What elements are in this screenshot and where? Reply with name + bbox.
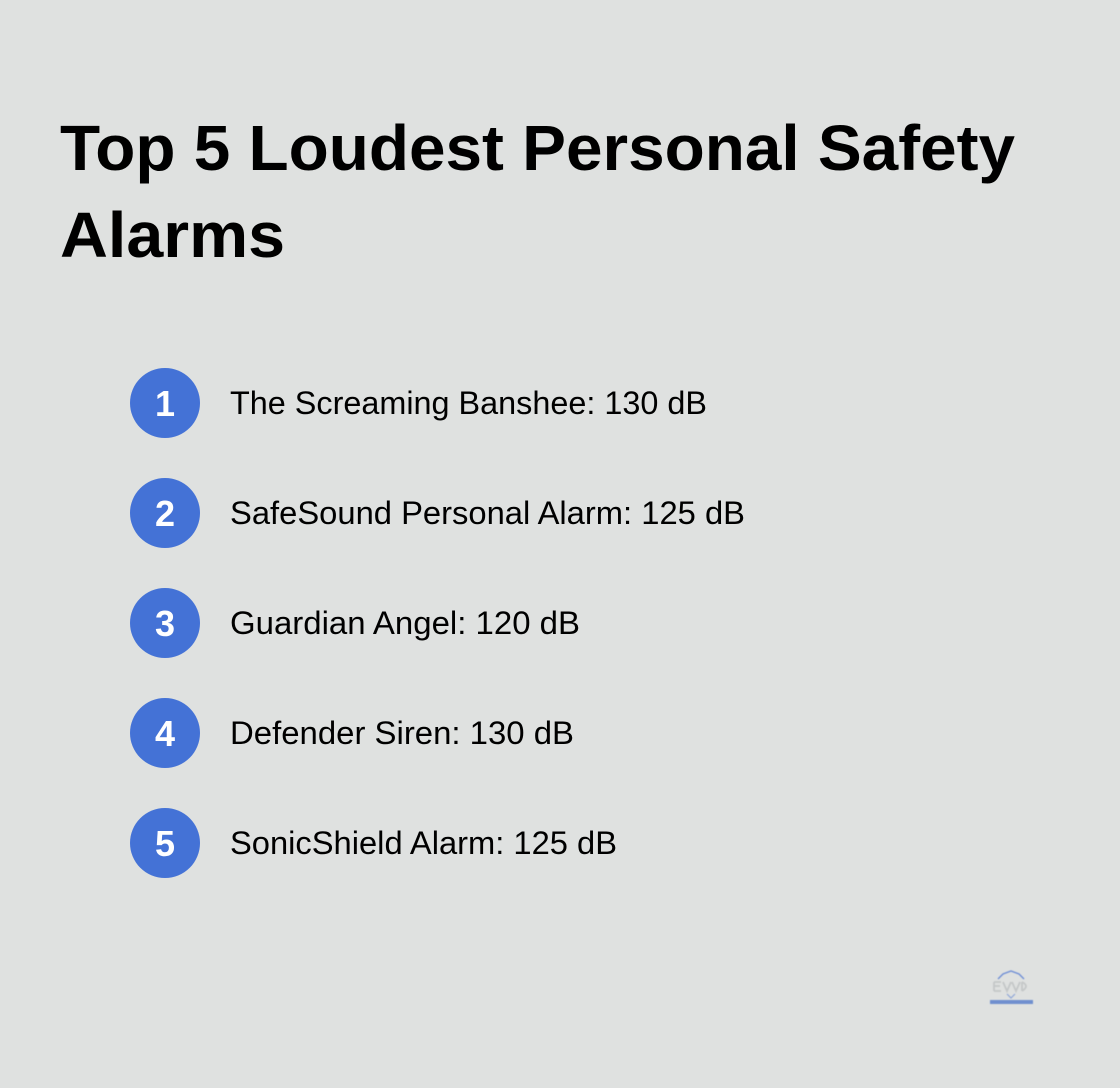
item 4: Defender Siren <box>130 698 574 768</box>
item 4: Defender Siren: Defender Siren: 130 dB <box>230 715 574 751</box>
item 3: Guardian Angel: Guardian Angel: 120 dB <box>230 605 580 641</box>
item 2: SafeSound Personal Alarm: SafeSound Personal Alarm: 125 dB <box>230 495 745 531</box>
item 3: Guardian Angel <box>130 588 580 658</box>
item 1: The Screaming Banshee <box>130 368 707 438</box>
item 5: SonicShield Alarm <box>130 808 617 878</box>
title <box>60 112 1015 271</box>
list of alarms <box>130 368 745 878</box>
item 3: Guardian Angel: 3 <box>155 603 175 644</box>
item 5: SonicShield Alarm: SonicShield Alarm: 125 dB <box>230 825 617 861</box>
item 1: The Screaming Banshee: The Screaming Banshee: 130 dB <box>230 385 707 421</box>
item 2: SafeSound Personal Alarm <box>130 478 745 548</box>
item 4: Defender Siren: 4 <box>155 713 175 754</box>
item 5: SonicShield Alarm: 5 <box>155 823 175 864</box>
item 1: The Screaming Banshee: 1 <box>155 383 175 424</box>
item 2: SafeSound Personal Alarm: 2 <box>155 493 175 534</box>
title: Top 5 Loudest Personal Safety <box>60 112 1015 184</box>
title: Alarms <box>60 199 285 271</box>
icon: watermark logo <box>990 971 1033 1004</box>
